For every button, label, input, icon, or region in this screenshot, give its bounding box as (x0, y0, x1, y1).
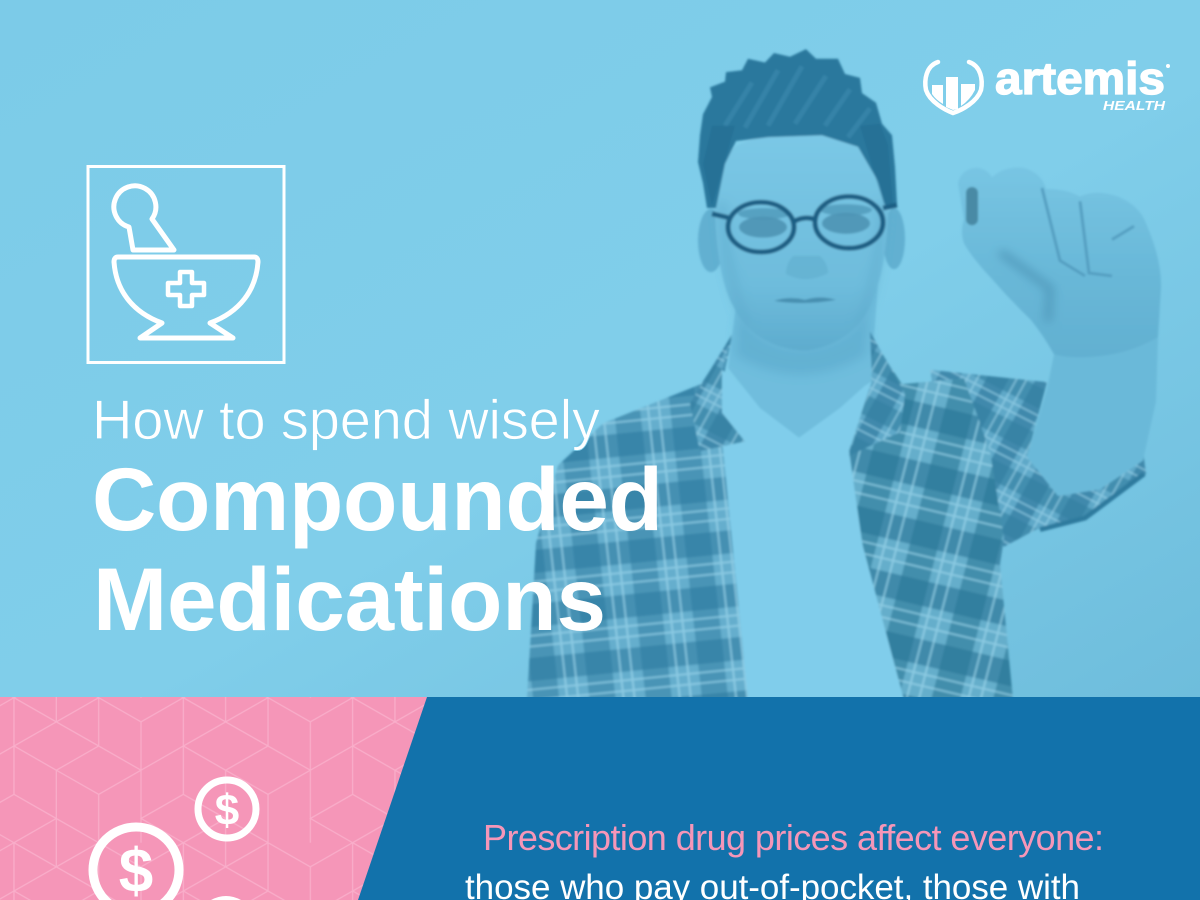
icon frame (88, 166, 284, 362)
capsule (966, 187, 978, 225)
title line 2: Medications (93, 549, 606, 649)
pestle (114, 186, 174, 250)
ear: left (698, 208, 720, 272)
title: intro line: How to spend wisely (92, 388, 600, 451)
icon: large dollar coin (93, 827, 179, 900)
cross (168, 272, 204, 306)
panel: pink cube pattern (0, 697, 440, 900)
icon: mortar and pestle in square frame (88, 166, 284, 362)
glasses (712, 197, 897, 252)
nose (788, 257, 826, 278)
logo heart (925, 62, 982, 113)
logo: artemis health (925, 53, 1170, 113)
eyes (738, 204, 872, 238)
photo: man holding a capsule (527, 49, 1161, 700)
sleeve cuff shadow (1040, 474, 1144, 530)
shirt: left front (526, 338, 748, 697)
title line 1: Compounded (92, 449, 663, 549)
neck shadow (738, 330, 865, 372)
finger lines (1042, 188, 1134, 276)
panel: blue text panel (358, 697, 1200, 900)
shirt collars (690, 331, 905, 456)
shirt: sleeve (930, 370, 1146, 547)
logo sub-label: HEALTH (1103, 98, 1166, 113)
logo wordmark: artemis (995, 53, 1165, 104)
icon: small dollar coin: $ (215, 786, 239, 835)
mouth (774, 297, 836, 303)
ear: right (883, 208, 905, 269)
t-shirt (720, 370, 904, 700)
title: Compounded Medications (92, 449, 663, 649)
face (715, 132, 888, 351)
palm shadow (1000, 252, 1050, 322)
bowl (114, 257, 258, 338)
icon: coin cut off at the bottom (211, 896, 241, 900)
shirt: right front (848, 372, 1014, 697)
hand (958, 168, 1161, 357)
panel: hero background (0, 0, 1200, 697)
icon: small dollar coin (198, 780, 256, 838)
hair (698, 49, 897, 208)
neck (728, 292, 877, 436)
hair dark sides (876, 177, 886, 204)
text: pink heading: Prescription drug prices affect everyone: (483, 817, 1104, 858)
hair strands (725, 66, 870, 137)
arm (1027, 337, 1158, 496)
logo registered mark (1166, 64, 1170, 68)
face side shadow (722, 211, 723, 212)
